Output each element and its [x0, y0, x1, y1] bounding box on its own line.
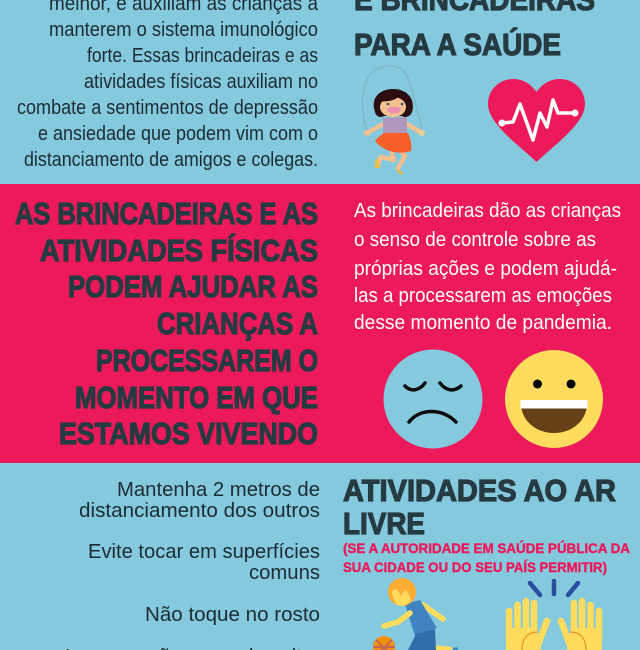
text block: sense of control: las a processarem as emoções	[354, 285, 612, 307]
heading: play for health: PARA A SAÚDE	[354, 26, 561, 62]
panel: bottom blue background	[0, 463, 640, 650]
panel: top blue background	[0, 0, 640, 184]
icon: heart with heartbeat	[488, 79, 585, 162]
text block: safety recommendations: Evite tocar em superfícies	[88, 541, 320, 563]
icon: raised hands	[506, 581, 602, 650]
text block: safety recommendations: distanciamento dos outros	[79, 500, 320, 522]
heading: outdoor activities: LIVRE	[343, 506, 425, 541]
text block: sense of control: desse momento de pandemia.	[354, 312, 612, 334]
text block: sense of control: o senso de controle sobre as	[354, 229, 596, 251]
heading: play for health	[354, 0, 595, 62]
text block: benefits of play: combate a sentimentos de depressão	[17, 97, 318, 119]
text block: sense of control: próprias ações e podem ajudá-	[354, 258, 617, 280]
text block: safety recommendations: comuns	[249, 562, 320, 584]
heading: play helps process the moment: ESTAMOS VIVENDO	[59, 416, 318, 451]
text block: benefits of play	[17, 0, 319, 171]
heading: outdoor activities: ATIVIDADES AO AR	[343, 473, 616, 508]
icon: left hand	[506, 601, 547, 650]
text block: benefits of play: forte. Essas brincadeiras e as	[87, 45, 318, 67]
text block: benefits of play: e ansiedade que podem vim com o	[38, 123, 318, 145]
icon: sad face	[384, 350, 482, 448]
text block: benefits of play: distanciamento de amigos e colegas.	[24, 149, 318, 171]
heading: outdoor activities	[343, 473, 616, 541]
heading: play helps process the moment	[15, 196, 318, 451]
icon: right hand	[561, 601, 602, 650]
heading: play helps process the moment: AS BRINCADEIRAS E AS	[15, 196, 318, 231]
text block: public health authority note	[343, 541, 630, 575]
panel: middle pink background	[0, 184, 640, 463]
text block: benefits of play: atividades físicas auxiliam no	[84, 71, 318, 93]
heading: play helps process the moment: CRIANÇAS A	[157, 306, 318, 341]
text block: safety recommendations: Mantenha 2 metros de	[117, 479, 320, 501]
text block: public health authority note: SUA CIDADE OU DO SEU PAÍS PERMITIR)	[343, 560, 607, 575]
icon: boy with basketball	[373, 578, 458, 650]
text block: benefits of play: manterem o sistema imunológico	[49, 19, 318, 41]
text block: public health authority note: (SE A AUTORIDADE EM SAÚDE PÚBLICA DA	[343, 541, 630, 556]
heading: play helps process the moment: ATIVIDADES FÍSICAS	[40, 233, 318, 268]
icon: happy face	[505, 350, 603, 448]
heading: play helps process the moment: PROCESSAREM O	[96, 343, 318, 378]
text block: sense of control	[354, 200, 621, 334]
heading: play helps process the moment: MOMENTO EM QUE	[75, 380, 318, 415]
heading: play helps process the moment: PODEM AJUDAR AS	[68, 269, 318, 304]
text block: safety recommendations: Não toque no rosto	[145, 604, 320, 626]
icon: girl jumping rope	[362, 66, 425, 174]
text block: safety recommendations	[65, 479, 320, 650]
text block: sense of control: As brincadeiras dão as crianças	[354, 200, 621, 222]
icon: sparkle lines	[530, 581, 578, 595]
